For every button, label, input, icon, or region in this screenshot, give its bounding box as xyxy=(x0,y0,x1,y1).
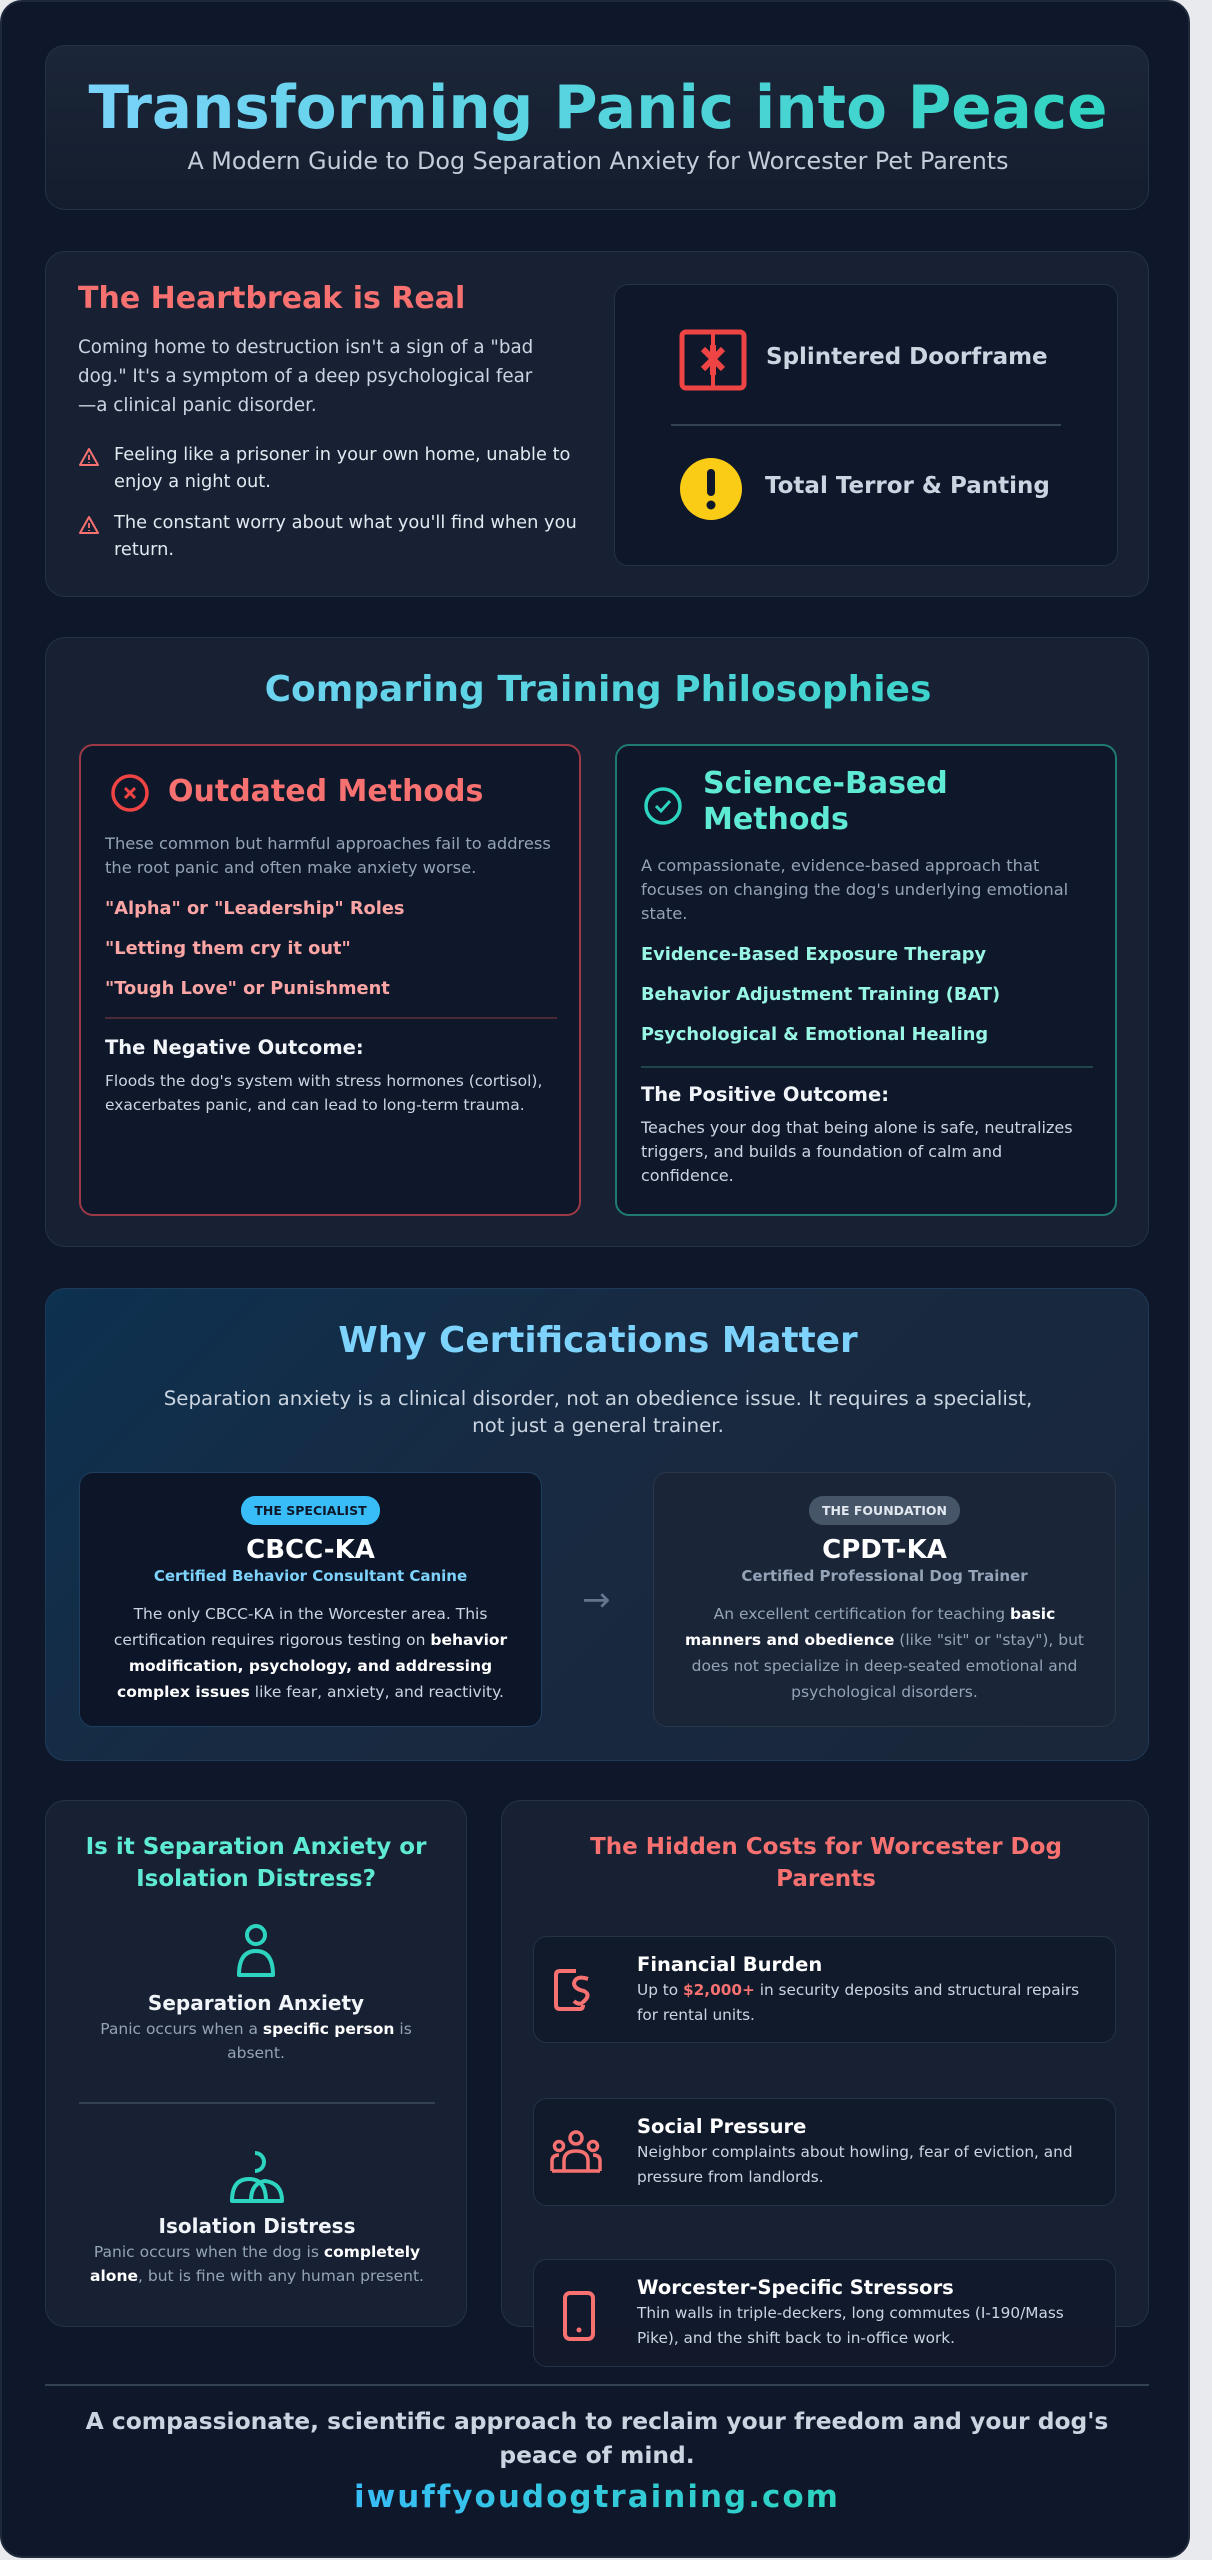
list: outdated xyxy=(105,898,405,999)
panel: heartbreak xyxy=(45,251,1149,597)
bullet list xyxy=(79,444,577,560)
panel: separation vs isolation xyxy=(45,1800,467,2327)
title: Transforming Panic into Peace xyxy=(89,74,1107,143)
outcome: negative: The Negative Outcome: xyxy=(105,1036,364,1059)
icon: person xyxy=(237,1924,275,1977)
panel: comparing philosophies xyxy=(45,637,1149,1247)
cert name: CBCC-KA xyxy=(246,1535,375,1565)
heading: Is it Separation Anxiety or Isolation Distress? xyxy=(86,1834,426,1892)
item: separation anxiety: Panic occurs when a specific person is absent. xyxy=(100,2020,412,2062)
card: foundation: Certified Professional Dog Trainer xyxy=(741,1567,1028,1585)
cost: stressors xyxy=(533,2259,1116,2367)
outcome: positive: Teaches your dog that being alone is safe, neutralizes triggers, and builds a foundation of calm and confidence. xyxy=(641,1118,1073,1185)
intro text: Coming home to destruction isn't a sign of a "bad dog." It's a symptom of a deep psychological fear —a clinical panic disorder. xyxy=(78,337,533,416)
list: outdated: "Alpha" or "Leadership" Roles xyxy=(105,898,405,919)
card: foundation: An excellent certification for teaching basic manners and obedience (like "sit" or "stay"), but does not specialize in deep-seated emotional and psychological disorders. xyxy=(685,1605,1084,1701)
cost: social: Neighbor complaints about howling, fear of eviction, and pressure from landlords. xyxy=(637,2143,1073,2186)
panel: hidden costs xyxy=(501,1800,1149,2327)
badge: foundation: THE FOUNDATION xyxy=(822,1503,947,1518)
list: science xyxy=(641,944,1000,1045)
label: splintered doorframe: Splintered Doorframe xyxy=(766,344,1048,370)
icon: person alone xyxy=(230,2151,284,2203)
icon: phone xyxy=(563,2291,595,2341)
item: separation anxiety xyxy=(100,1991,412,2062)
card: foundation xyxy=(653,1472,1116,1727)
heading: heartbreak: The Heartbreak is Real xyxy=(78,281,465,316)
card: specialist: The only CBCC-KA in the Worcester area. This certification requires rigorous testing on behavior modification, psychology, and addressing complex issues like fear, anxiety, and reactivity. xyxy=(114,1605,507,1701)
footer tagline: A compassionate, scientific approach to reclaim your freedom and your dog's peace of mind. xyxy=(86,2407,1108,2469)
icon: splintered door xyxy=(680,330,746,390)
badge: specialist: THE SPECIALIST xyxy=(254,1503,367,1518)
label: terror: Total Terror & Panting xyxy=(765,473,1050,499)
intro: Separation anxiety is a clinical disorder, not an obedience issue. It requires a specialist, not just a general trainer. xyxy=(164,1387,1032,1437)
symptom box xyxy=(614,284,1118,566)
badge: specialist xyxy=(241,1496,380,1525)
list: outdated: "Letting them cry it out" xyxy=(105,938,351,959)
subtitle: A Modern Guide to Dog Separation Anxiety for Worcester Pet Parents xyxy=(187,147,1009,175)
bullet: worry: The constant worry about what you'll find when you return. xyxy=(114,512,577,560)
outcome: positive: The Positive Outcome: xyxy=(641,1083,889,1106)
list: science: Behavior Adjustment Training (BAT) xyxy=(641,984,1000,1005)
header card xyxy=(45,45,1149,210)
outcome: negative xyxy=(105,1036,542,1114)
icon: group xyxy=(550,2130,602,2173)
icon: x circle xyxy=(111,774,149,812)
outcome: negative: Floods the dog's system with stress hormones (cortisol), exacerbates panic, and can lead to long-term trauma. xyxy=(105,1072,542,1114)
item: separation anxiety: Separation Anxiety xyxy=(148,1991,364,2015)
desc: These common but harmful approaches fail to address the root panic and often make anxiety worse. xyxy=(105,834,551,877)
cert name: CPDT-KA xyxy=(822,1535,947,1565)
bullet: prisoner: Feeling like a prisoner in your own home, unable to enjoy a night out. xyxy=(114,444,570,492)
card: specialist: Certified Behavior Consultant Canine xyxy=(154,1567,467,1585)
card: specialist xyxy=(79,1472,542,1727)
heading: comparing xyxy=(46,667,1150,713)
list: outdated: "Tough Love" or Punishment xyxy=(105,978,390,999)
icon: alert xyxy=(680,458,742,520)
heading: comparing: Comparing Training Philosophies xyxy=(265,669,931,710)
cost: financial xyxy=(533,1936,1116,2043)
title: outdated: Outdated Methods xyxy=(168,774,483,809)
icon: money xyxy=(554,1969,590,2011)
card: science xyxy=(615,744,1117,1216)
panel: certifications xyxy=(45,1288,1149,1761)
cost: social: Social Pressure xyxy=(637,2115,806,2138)
cost: social xyxy=(533,2098,1116,2206)
list: science: Evidence-Based Exposure Therapy xyxy=(641,944,986,965)
desc: A compassionate, evidence-based approach that focuses on changing the dog's underlying emotional state. xyxy=(641,856,1068,923)
item: isolation distress: Panic occurs when the dog is completely alone, but is fine with any human present. xyxy=(90,2243,424,2285)
item: isolation distress: Isolation Distress xyxy=(159,2214,355,2238)
cost: financial: Up to $2,000+ in security deposits and structural repairs for rental units. xyxy=(637,1981,1079,2024)
card: outdated xyxy=(79,744,581,1216)
list: science: Psychological & Emotional Healing xyxy=(641,1024,988,1045)
cost: stressors: Worcester-Specific Stressors xyxy=(637,2276,954,2299)
badge: foundation xyxy=(809,1496,960,1525)
heading: The Hidden Costs for Worcester Dog Parents xyxy=(590,1834,1062,1892)
icon: check circle xyxy=(644,787,682,825)
footer url: iwuffyoudogtraining.com xyxy=(354,2479,840,2515)
outcome: positive xyxy=(640,1083,1073,1185)
arrow: → xyxy=(582,1580,610,1620)
item: isolation distress xyxy=(90,2214,424,2285)
title: science: Science-Based Methods xyxy=(703,766,948,837)
cost: financial: Financial Burden xyxy=(637,1953,822,1976)
heading: certifications: Why Certifications Matter xyxy=(338,1320,858,1361)
cost: stressors: Thin walls in triple-deckers, long commutes (I-190/Mass Pike), and the shift back to in-office work. xyxy=(637,2304,1064,2347)
